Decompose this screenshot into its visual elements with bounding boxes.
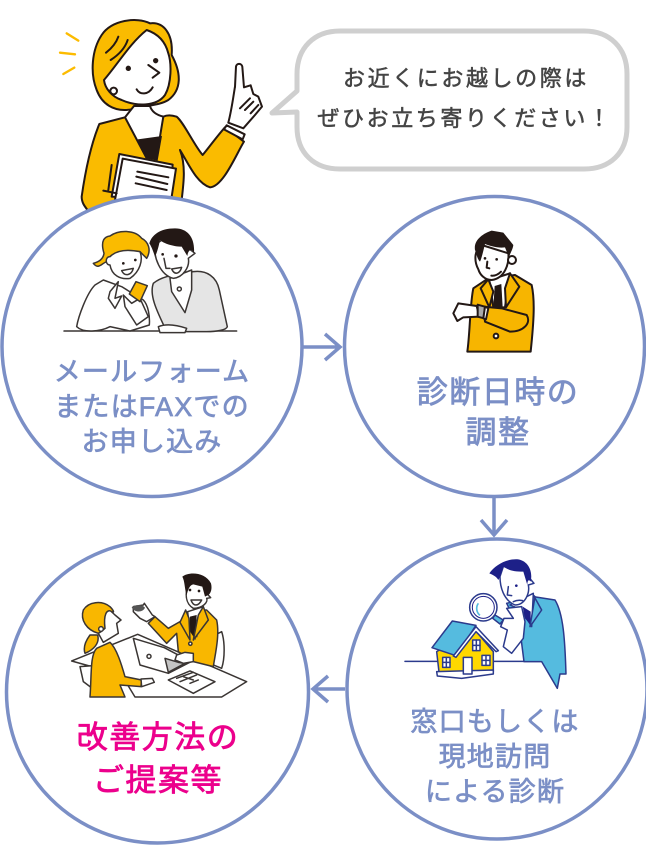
arrow: step 2 to 3: [481, 498, 507, 535]
step 1 label: またはFAXでの: [54, 392, 250, 422]
arrow: step 1 to 2: [303, 334, 340, 360]
icon: consultant meeting with client at a desk: [72, 573, 247, 697]
step 2 label: 調整: [466, 415, 530, 450]
illustration: woman pointing up holding a folder: [60, 20, 262, 213]
panel: step 4 improvement proposal: [6, 541, 308, 843]
step 1 label: [54, 357, 250, 457]
icon: man inspecting house with magnifier: [405, 559, 566, 688]
step 2 label: [417, 375, 579, 450]
step 4 label: ご提案等: [93, 763, 223, 798]
step 3 label: 窓口もしくは: [410, 707, 580, 737]
panel: step 2 schedule adjustment: [344, 196, 644, 496]
step 2 label: 診断日時の: [417, 375, 579, 410]
icon: man checking wristwatch: [453, 231, 534, 352]
arrow: step 3 to 4: [313, 676, 345, 702]
icon: couple looking at smartphone: [64, 228, 237, 333]
step 1 label: お申し込み: [82, 427, 222, 457]
bubble text: [317, 66, 613, 131]
step 1 label: メールフォーム: [54, 357, 250, 387]
panel: step 1 mail form or fax: [2, 196, 302, 496]
step 3 label: による診断: [425, 777, 565, 807]
bubble text: お近くにお越しの際は: [343, 66, 589, 91]
step 4 label: 改善方法の: [77, 720, 239, 755]
step 3 label: 現地訪問: [439, 742, 551, 772]
speech bubble: [272, 31, 627, 169]
bubble outline: [272, 31, 627, 169]
step 4 label: [77, 720, 239, 798]
bubble text: ぜひお立ち寄りください！: [317, 106, 613, 131]
step 3 label: [410, 707, 580, 807]
panel: step 3 on-site diagnosis: [347, 539, 646, 839]
